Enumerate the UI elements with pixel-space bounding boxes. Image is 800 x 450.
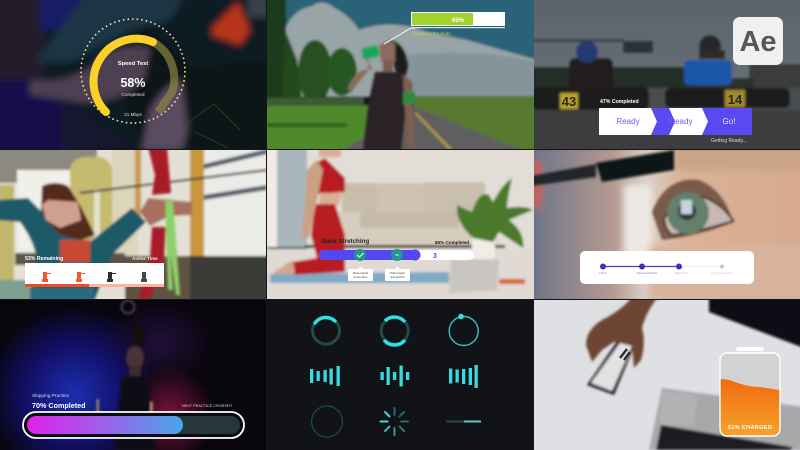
- photo: eye with mascara wand: [529, 145, 800, 305]
- tip card one: Place hands: [353, 271, 369, 275]
- next practice label: NEXT PRACTICE CROSSFIT: [182, 404, 233, 408]
- ring loader one: [312, 317, 340, 344]
- tip card one: [348, 266, 373, 281]
- step label 4: Finish your Lashes: [711, 271, 734, 275]
- archer icon 2: [76, 272, 85, 282]
- spinner: [380, 408, 408, 435]
- stepper card: [580, 251, 754, 284]
- equaliser one: [310, 366, 340, 386]
- step dot 3: [676, 264, 682, 270]
- percent completed: 70% Completed: [32, 401, 86, 410]
- equaliser two: [380, 366, 409, 386]
- linear loader: [446, 420, 481, 422]
- kart number 14: 14: [728, 92, 743, 107]
- woman figure: [347, 40, 415, 150]
- step steady: Steady: [668, 117, 692, 126]
- ready steady go stepper: [599, 108, 752, 135]
- tip card two: and stretch: [391, 275, 405, 279]
- step ready: Ready: [616, 117, 640, 126]
- step label 3: Finger Curl: [675, 271, 688, 275]
- gauge title: Speed Test: [118, 61, 148, 67]
- ring loader three: [449, 314, 478, 346]
- bar caption: Hydrating the body: [412, 31, 451, 36]
- panel: back stretching: [264, 147, 537, 303]
- tip card two: [385, 266, 410, 281]
- panel: loading icon set: [267, 300, 534, 450]
- photo: archer in a hall: [0, 147, 270, 305]
- completion label: 47% Completed: [600, 99, 639, 105]
- skipping progress bar: [23, 412, 244, 438]
- panel: archery: [0, 147, 270, 305]
- photo: athlete jumping rope with neon lights: [0, 300, 267, 450]
- equaliser three: [449, 365, 478, 388]
- AE logo tile: [733, 17, 783, 65]
- archer icon 3: [107, 272, 116, 282]
- tip card one: on the floor: [354, 275, 368, 279]
- gauge percent: 58%: [120, 76, 146, 90]
- photo: hand with phone on laptop desk: [586, 297, 800, 450]
- callout pointer line: [384, 28, 416, 44]
- panel: speed test: [0, 0, 275, 155]
- active label: Active Time: [132, 256, 158, 261]
- panel: skipping practice: [0, 300, 267, 450]
- exercise progress bar: [319, 249, 474, 261]
- exercise title: Back Stretching: [322, 238, 369, 245]
- gauge speed: 21 Mbps: [124, 112, 143, 117]
- getting ready caption: Getting Ready...: [711, 138, 747, 144]
- desk backdrop: [534, 300, 800, 450]
- step number: 3: [433, 253, 437, 260]
- photo: go-karts at start line: [531, 0, 800, 153]
- percent label: 65%: [452, 18, 465, 24]
- step label 2: Sweep and Brush: [637, 271, 658, 275]
- panel: hydration: [264, 0, 537, 153]
- kart number 43: 43: [562, 94, 576, 109]
- step label 1: Lift Up: [599, 271, 607, 275]
- keyboard glow lines: [180, 104, 240, 148]
- remaining label: 53% Remaining: [25, 256, 63, 262]
- photo: woman drinking on a road: [264, 0, 537, 153]
- battery label: 51% CHARGED: [728, 425, 772, 431]
- radial gauge: [81, 19, 185, 123]
- archer icon 4: [141, 272, 147, 282]
- phone screen stripes: [620, 349, 630, 360]
- step dot 2: [639, 264, 645, 270]
- AE logo tile: Ae: [739, 26, 777, 58]
- photo: hands holding phone over keyboard: [0, 0, 275, 155]
- battery cap: [736, 347, 764, 351]
- arrow and bow: [80, 147, 267, 300]
- step dot 4: [720, 264, 724, 268]
- archery progress strip: [25, 263, 164, 287]
- step dot 1: [600, 264, 606, 270]
- skipping label: Skipping Practice: [32, 393, 69, 399]
- tip card two: Pull forward: [390, 271, 405, 275]
- eye: [652, 180, 733, 240]
- battery widget: [720, 347, 780, 436]
- archer icon 1: [42, 272, 51, 282]
- step go: Go!: [723, 117, 735, 126]
- panel: battery charging: [534, 297, 800, 450]
- mascara wand: [531, 150, 674, 186]
- photo: woman stretching in a living room: [264, 147, 537, 303]
- ring loader two: [381, 317, 408, 345]
- hydration progress bar: [411, 12, 505, 36]
- panel: karting: [531, 0, 800, 153]
- gauge status: Completed: [121, 92, 145, 98]
- panel: makeup eye: [529, 145, 800, 305]
- empty ring loader: [312, 406, 342, 437]
- dash marker: [391, 249, 403, 261]
- completion label: 85% Completed: [435, 240, 469, 245]
- check marker: [354, 249, 366, 261]
